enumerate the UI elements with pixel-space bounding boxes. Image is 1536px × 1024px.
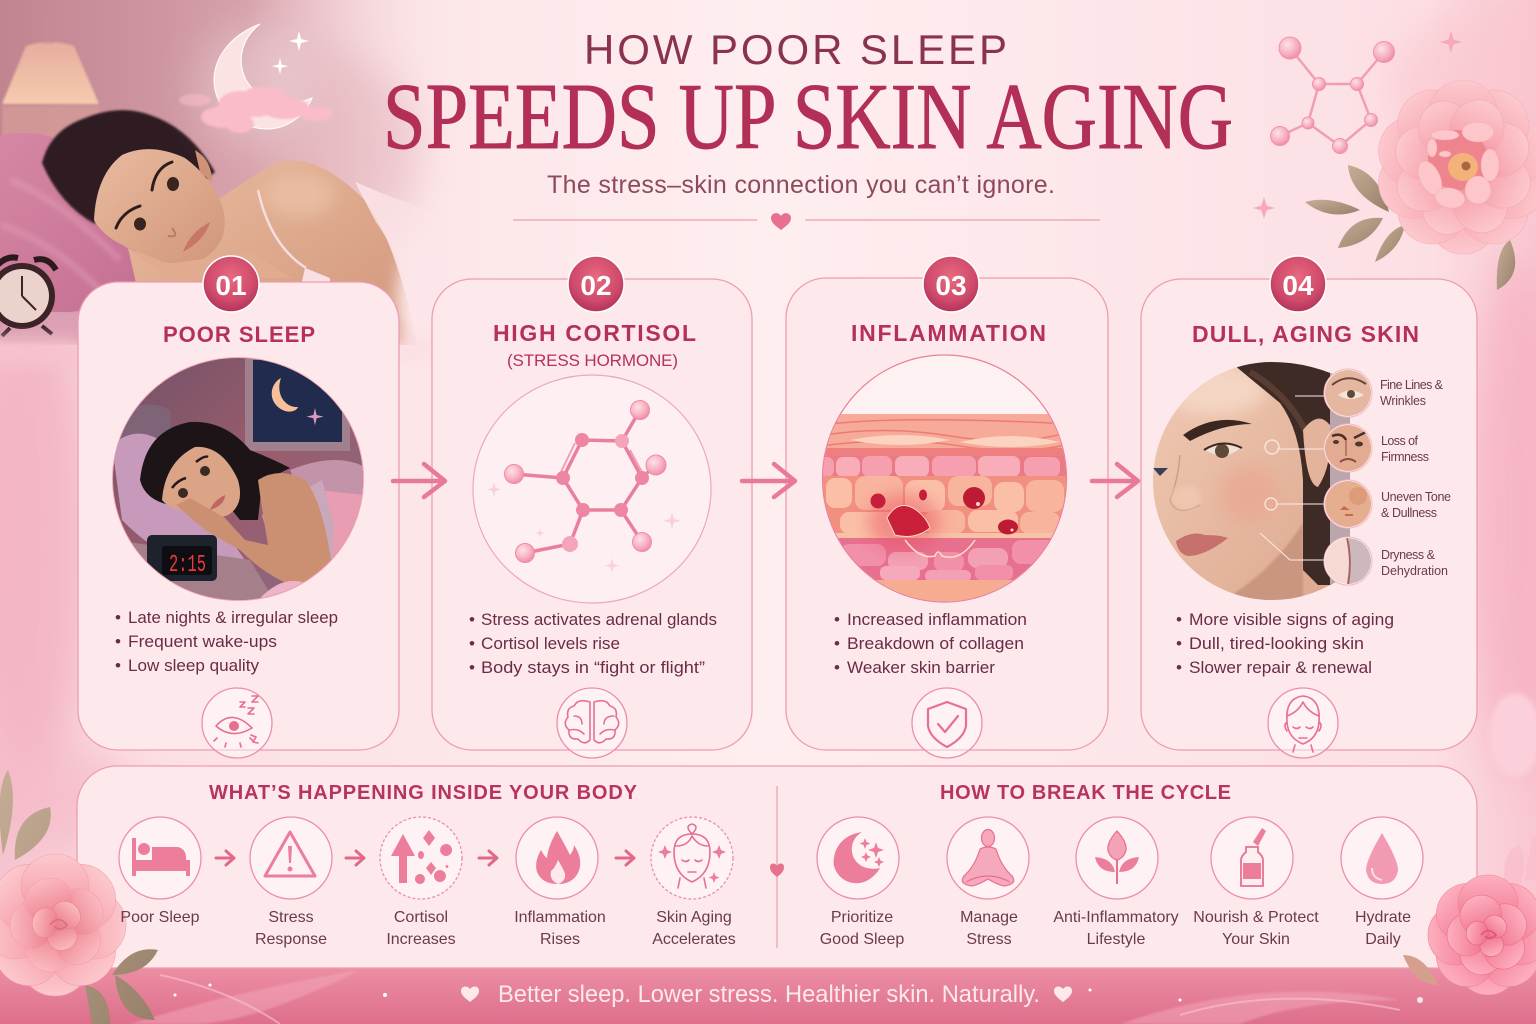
panel: step 4 dull aging skin xyxy=(1141,256,1477,758)
heading: HIGH CORTISOL xyxy=(493,320,696,346)
step: skin aging accelerates xyxy=(651,817,736,948)
step number xyxy=(1270,256,1326,312)
step number xyxy=(923,256,979,312)
callout labels: Uneven Tone xyxy=(1381,490,1451,504)
tip: manage stress: Manage xyxy=(960,909,1018,926)
arrow xyxy=(216,851,234,865)
divider with heart xyxy=(513,213,1100,230)
bullet list: • xyxy=(1176,658,1182,677)
step: cortisol increases: Cortisol xyxy=(394,909,448,926)
tip: anti-inflammatory lifestyle: Anti-Inflammatory xyxy=(1053,909,1179,926)
title: HOW POOR SLEEP xyxy=(584,26,1007,73)
divider with heart xyxy=(770,786,784,948)
detail: dryness xyxy=(1324,537,1373,585)
sparkles xyxy=(1253,31,1462,219)
title: SPEEDS UP SKIN AGING xyxy=(383,65,1233,169)
illustration: inflamed skin layers xyxy=(806,355,1070,604)
detail: fine lines xyxy=(1324,369,1372,417)
forearm xyxy=(124,246,201,264)
illustration: bedroom with woman lying on pillow xyxy=(0,42,428,345)
bullet list: • xyxy=(834,658,840,677)
bullet list: Late nights & irregular sleep xyxy=(128,608,338,627)
icon: sleepy eye xyxy=(202,688,272,758)
step number: 03 xyxy=(935,270,967,301)
bullet list: Breakdown of collagen xyxy=(847,634,1024,653)
bullet list xyxy=(469,610,717,677)
callout labels: Dryness & xyxy=(1381,548,1436,562)
step: inflammation rises: Inflammation xyxy=(514,909,606,926)
arrow 1 to 2 xyxy=(393,464,445,497)
bullet list: • xyxy=(834,634,840,653)
decoration: rose bottom left xyxy=(0,770,158,1024)
callout labels: Firmness xyxy=(1381,450,1429,464)
tip: nourish and protect skin xyxy=(1193,817,1319,948)
panel: step 3 inflammation xyxy=(786,256,1108,758)
tip: anti-inflammatory lifestyle xyxy=(1053,817,1179,948)
icon: brain xyxy=(557,688,627,758)
bullet list: Body stays in “fight or flight” xyxy=(481,658,705,677)
bullet list: • xyxy=(115,656,121,675)
bullet list: • xyxy=(115,632,121,651)
callout labels: Dehydration xyxy=(1381,564,1448,578)
illustration: cortisol molecule xyxy=(473,375,711,603)
decoration: rose bottom right xyxy=(1403,835,1536,999)
heading: inside your body: WHAT’S HAPPENING INSIDE YOUR BODY xyxy=(209,782,638,804)
icon: shield xyxy=(912,688,982,758)
decoration: peony with leaves xyxy=(1305,75,1536,290)
heading: DULL, AGING SKIN xyxy=(1192,321,1419,347)
bullet list xyxy=(1176,610,1394,677)
illustration: close-up of face xyxy=(1150,360,1355,605)
detail: loss of firmness xyxy=(1324,424,1372,472)
arrow xyxy=(479,851,497,865)
camisole xyxy=(355,182,405,238)
tip: prioritize good sleep xyxy=(817,817,904,948)
step: stress response: Response xyxy=(255,931,327,948)
tagline: Better sleep. Lower stress. Healthier skin. Naturally. xyxy=(498,981,1040,1008)
step: stress response xyxy=(250,817,332,948)
bullet list: Dull, tired-looking skin xyxy=(1189,634,1364,653)
tip: manage stress: Stress xyxy=(966,931,1012,948)
panel: bottom backing xyxy=(77,766,1477,968)
heart xyxy=(461,987,479,1002)
tip: hydrate daily xyxy=(1341,817,1423,948)
heading: break the cycle: HOW TO BREAK THE CYCLE xyxy=(940,782,1231,804)
illustration: woman awake at 2:15: 2:15 xyxy=(169,552,206,579)
detail: uneven tone xyxy=(1324,480,1372,528)
panel: step 1 poor sleep xyxy=(78,256,399,758)
tip: nourish and protect skin: Nourish & Protect xyxy=(1193,909,1319,926)
tip: hydrate daily: Daily xyxy=(1365,931,1401,948)
facial features xyxy=(116,162,210,252)
tip: prioritize good sleep: Prioritize xyxy=(831,909,893,926)
subtitle: The stress–skin connection you can’t ignore. xyxy=(547,171,1055,199)
bullet list: • xyxy=(1176,610,1182,629)
bullet list: Cortisol levels rise xyxy=(481,634,620,653)
step number xyxy=(203,256,259,312)
bullet list: Stress activates adrenal glands xyxy=(481,610,717,629)
bullet list: Low sleep quality xyxy=(128,656,259,675)
arrow xyxy=(616,851,634,865)
arrow 3 to 4 xyxy=(1092,464,1138,497)
arrow xyxy=(346,851,364,865)
molecule decoration xyxy=(1270,37,1394,154)
alarm clock xyxy=(0,257,56,336)
bullet list: Weaker skin barrier xyxy=(847,658,995,677)
panel: bottom body and habits xyxy=(77,766,1477,968)
step number: 01 xyxy=(215,270,247,301)
callout labels: Fine Lines & xyxy=(1380,378,1444,392)
callout labels: Wrinkles xyxy=(1380,394,1426,408)
tip: hydrate daily: Hydrate xyxy=(1355,909,1411,926)
lamp xyxy=(2,42,100,138)
bullet list: • xyxy=(1176,634,1182,653)
step: inflammation rises xyxy=(514,817,606,948)
bullet list: • xyxy=(469,658,475,677)
tip: prioritize good sleep: Good Sleep xyxy=(820,931,904,948)
hair xyxy=(42,110,215,224)
bullet list: Increased inflammation xyxy=(847,610,1027,629)
step: inflammation rises: Rises xyxy=(540,931,580,948)
arrow 2 to 3 xyxy=(742,464,795,497)
step: skin aging accelerates: Accelerates xyxy=(652,931,736,948)
shoulder and arm xyxy=(128,160,418,345)
footer band xyxy=(0,968,1536,1024)
bullet list: • xyxy=(834,610,840,629)
heading: POOR SLEEP xyxy=(163,322,315,347)
bullet list: • xyxy=(469,634,475,653)
illustration: woman awake at 2:15 xyxy=(110,350,370,610)
pillow xyxy=(0,132,137,312)
bullet list: • xyxy=(469,610,475,629)
bullet list xyxy=(834,610,1027,677)
step: poor sleep: Poor Sleep xyxy=(120,909,200,926)
callout labels xyxy=(1380,378,1451,578)
tip: nourish and protect skin: Your Skin xyxy=(1222,931,1290,948)
tip: manage stress xyxy=(947,817,1029,948)
bullet list: More visible signs of aging xyxy=(1189,610,1394,629)
step number xyxy=(568,256,624,312)
step number: 04 xyxy=(1282,270,1314,301)
heart xyxy=(1054,987,1072,1002)
step: cortisol increases: Increases xyxy=(386,931,456,948)
step: cortisol increases xyxy=(380,817,462,948)
face xyxy=(94,149,225,263)
step: stress response: Stress xyxy=(268,909,314,926)
icon: calm face xyxy=(1268,688,1338,758)
bullet list: Frequent wake-ups xyxy=(128,632,277,651)
step: skin aging accelerates: Skin Aging xyxy=(656,909,732,926)
step: poor sleep xyxy=(119,817,201,926)
subheading: (STRESS HORMONE) xyxy=(507,351,678,370)
title xyxy=(383,26,1233,169)
callout labels: Loss of xyxy=(1381,434,1419,448)
step number: 02 xyxy=(580,270,612,301)
icon: crescent moon on cloud xyxy=(179,24,333,145)
callout labels: & Dullness xyxy=(1381,506,1437,520)
bullet list: Slower repair & renewal xyxy=(1189,658,1372,677)
tip: anti-inflammatory lifestyle: Lifestyle xyxy=(1087,931,1145,948)
bullet list: • xyxy=(115,608,121,627)
heading: INFLAMMATION xyxy=(851,320,1046,346)
bullet list xyxy=(115,608,338,675)
panel: step 2 high cortisol xyxy=(432,256,752,758)
